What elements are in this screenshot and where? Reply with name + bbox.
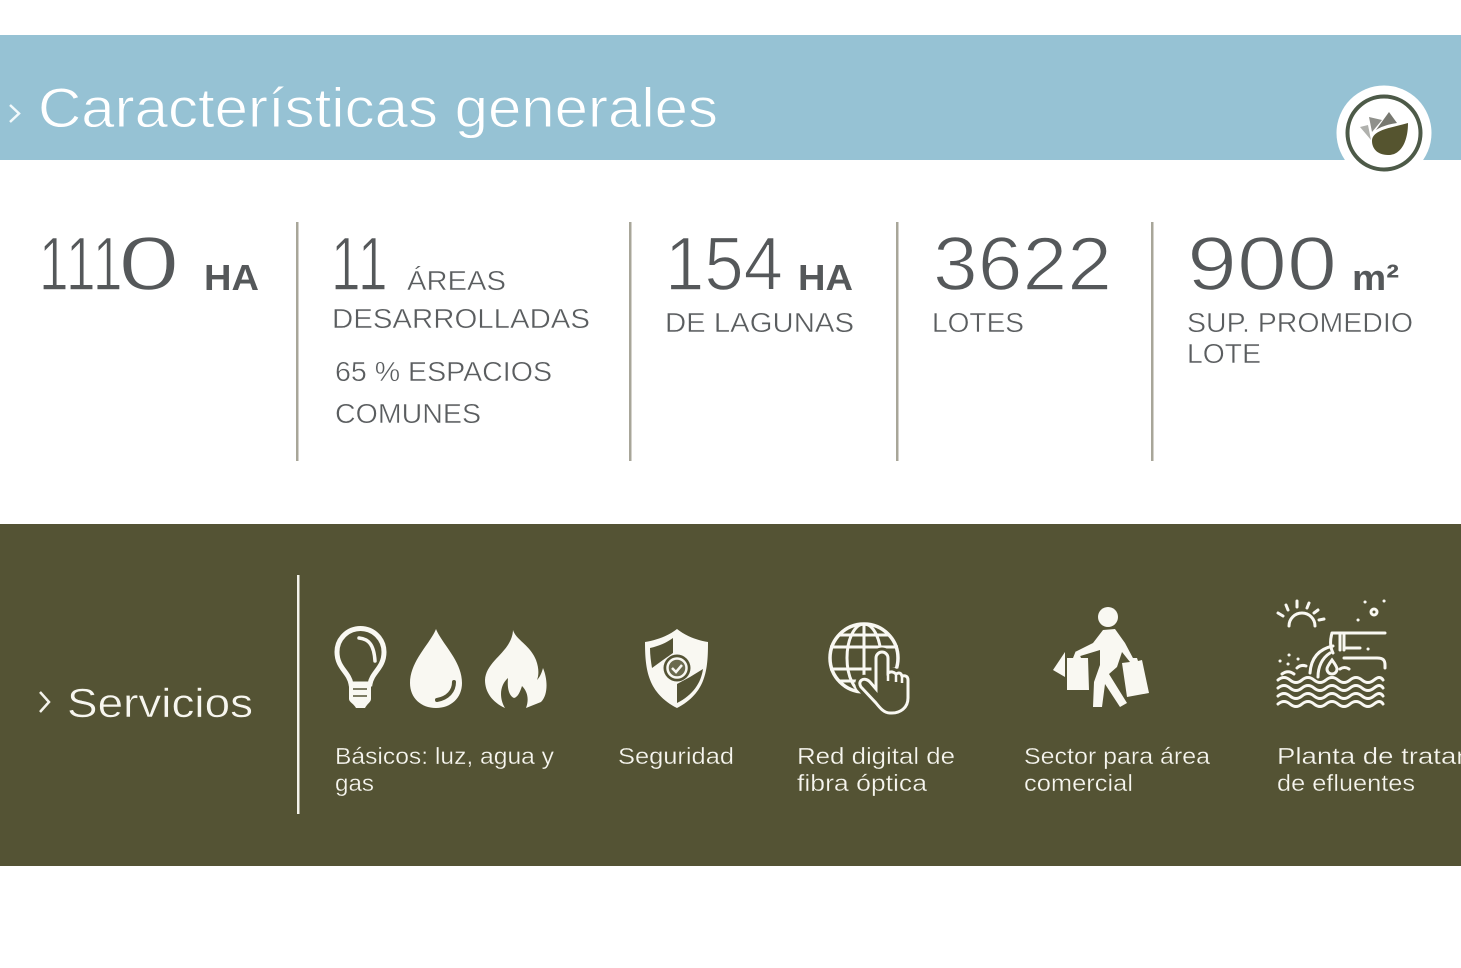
stat: 900 m2: 900 [1187, 222, 1337, 307]
stat: 154 ha: HA [798, 257, 853, 298]
icon: globe with hand [830, 624, 908, 713]
stat: 154 ha: DE LAGUNAS [665, 307, 854, 338]
header chevron [10, 105, 19, 122]
services heading: Servicios [67, 680, 253, 726]
services divider [297, 575, 300, 814]
label: basicos: gas [335, 770, 374, 796]
label: area comercial [1024, 743, 1210, 796]
stat: 154 ha: 154 [665, 222, 783, 307]
icon: light bulb [337, 628, 384, 708]
stat: 11 areas: DESARROLLADAS [332, 303, 590, 334]
stat: 900 m2: LOTE [1187, 338, 1261, 369]
stat: 11 areas: 65 % ESPACIOS [335, 356, 552, 387]
label: fibra optica: Red digital de [797, 743, 955, 769]
label: area comercial: comercial [1024, 770, 1133, 796]
title: Características generales [38, 76, 718, 139]
services panel [0, 524, 1461, 866]
label: area comercial: Sector para área [1024, 743, 1210, 769]
stat: 154 ha [665, 222, 854, 338]
services chevron [40, 692, 49, 712]
divider 4 [1151, 222, 1154, 461]
label: fibra optica [797, 743, 955, 796]
stat: 11 areas: COMUNES [335, 398, 481, 429]
stat: 900 m2 [1187, 222, 1413, 369]
label: basicos [335, 743, 555, 796]
icon: flame [485, 630, 547, 708]
icon: effluent treatment [1278, 601, 1385, 706]
stat: 3622 lotes [932, 222, 1112, 338]
label: fibra optica: fibra óptica [797, 770, 927, 796]
header band [0, 35, 1461, 160]
stat: 900 m2: SUP. PROMEDIO [1187, 307, 1413, 338]
divider 1 [296, 222, 298, 461]
label: planta de tratamiento: de efluentes [1277, 770, 1415, 796]
logo badge [1336, 86, 1432, 180]
icon: shopper with bags [1053, 607, 1149, 707]
stat: 1110 ha [39, 222, 259, 307]
label: planta de tratamiento [1277, 743, 1461, 796]
stat: 11 areas: ÁREAS [407, 265, 506, 296]
stat: 3622 lotes: LOTES [932, 307, 1024, 338]
stat: 11 areas: 11 [331, 222, 388, 306]
stat: 900 m2: m² [1352, 257, 1399, 298]
stat: 3622 lotes: 3622 [933, 222, 1112, 307]
stat: 1110 ha: 111 [39, 222, 122, 306]
icon: shield [645, 629, 708, 708]
stat: 1110 ha: 0 [118, 222, 180, 307]
divider 2 [629, 222, 632, 461]
divider 3 [896, 222, 898, 461]
stat: 11 areas [331, 222, 590, 429]
label: basicos: Básicos: luz, agua y [335, 743, 555, 769]
icon: water drop [410, 629, 462, 708]
label: seguridad: Seguridad [618, 743, 734, 769]
stat: 1110 ha: HA [204, 257, 259, 298]
